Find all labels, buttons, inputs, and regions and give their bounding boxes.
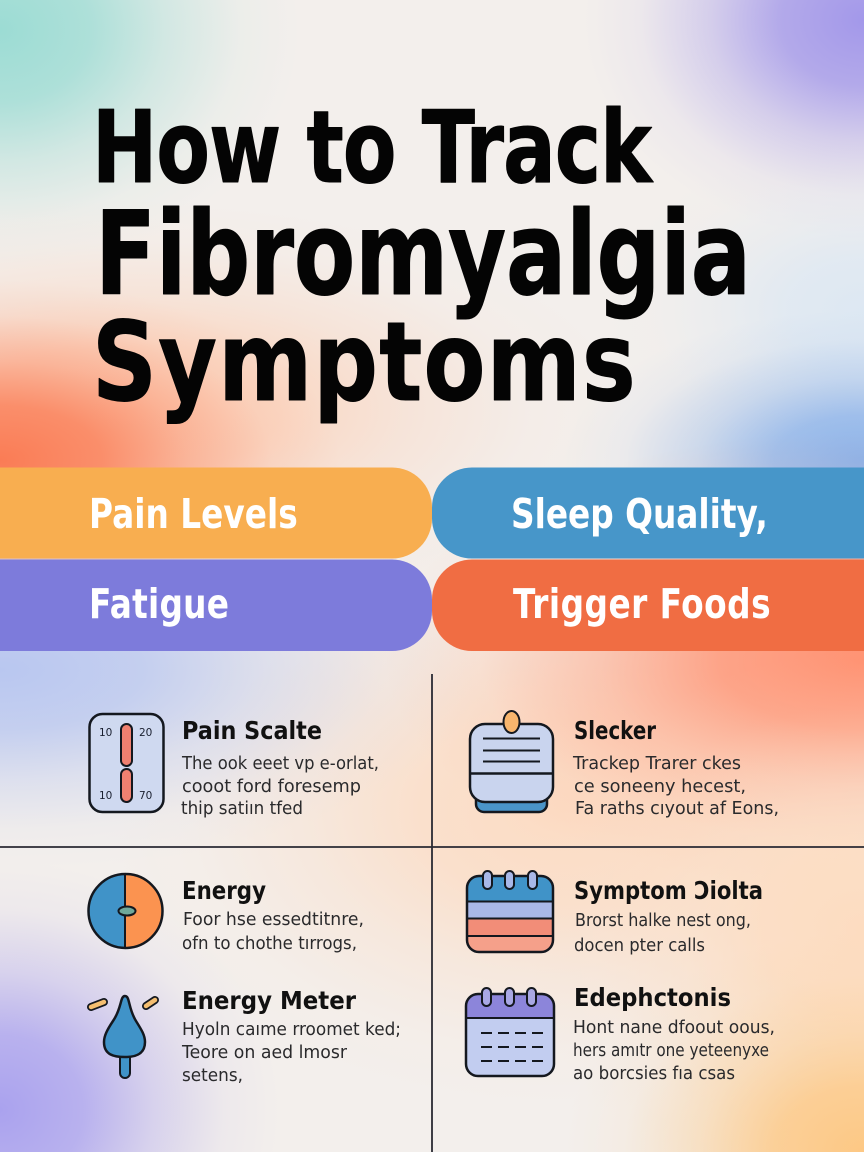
pill: pain levels — [0, 468, 432, 558]
icon: sleep tracker — [470, 711, 553, 812]
pill: pain levels: Pain Levels — [89, 490, 298, 538]
heading: energy: Energy — [182, 876, 266, 905]
pill: sleep quality — [432, 468, 864, 558]
heading: edephctonis: Edephctonis — [574, 983, 731, 1012]
description: energy meter — [181, 1020, 401, 1086]
description: symptom diary: Brorst halke nest ong, — [575, 911, 751, 931]
description: energy meter: Teore on aed lmosr — [181, 1043, 348, 1063]
title — [92, 91, 751, 426]
item: slecker — [470, 711, 779, 819]
pill: trigger foods: Trigger Foods — [513, 580, 771, 628]
item: energy — [88, 874, 364, 954]
description: slecker: Trackep Trarer ckes — [572, 754, 741, 774]
category pills — [0, 468, 864, 651]
item: symptom diary — [467, 871, 763, 956]
pill: trigger foods — [432, 560, 864, 651]
icon: pain scale gauge: 70 — [139, 790, 152, 802]
description: energy: ofn to chothe tırrogs, — [182, 934, 357, 954]
heading: pain scale: Pain Scalte — [182, 716, 322, 745]
icon: energy dial — [88, 874, 162, 948]
description: pain scale: thip satiın tfed — [181, 799, 303, 819]
item: pain scale — [90, 714, 379, 819]
description: edephctonis: hers amıtr one yeteenyxe — [573, 1041, 769, 1061]
pill: fatigue: Fatigue — [89, 580, 229, 628]
description: pain scale: cooot ford foresemp — [182, 777, 361, 797]
title: Fibromyalgia — [95, 188, 751, 322]
description: energy meter: setens, — [182, 1066, 243, 1086]
item: energy meter — [91, 986, 401, 1086]
description: energy: Foor hse essedtitnre, — [183, 910, 364, 930]
icon: pain scale gauge: 20 — [139, 727, 152, 739]
icon: lined calendar — [466, 988, 554, 1076]
pill: sleep quality: Sleep Quality, — [511, 490, 768, 538]
description: edephctonis — [573, 1018, 775, 1084]
description: pain scale: The ook eeet vp e-orlat, — [181, 754, 379, 774]
description: energy meter: Hyoln caıme rroomet ked; — [182, 1020, 401, 1040]
icon: pain scale gauge: 10 — [99, 727, 112, 739]
title: Symptoms — [92, 298, 636, 426]
description: slecker: Fa raths cıyout af Eons, — [575, 799, 779, 819]
grid dividers — [0, 674, 864, 1152]
item: edephctonis — [466, 983, 775, 1084]
heading: symptom diary: Symptom Ɔiolta — [574, 876, 763, 905]
heading: slecker: Slecker — [574, 716, 657, 745]
description: edephctonis: Hont nane dfoout oous, — [573, 1018, 775, 1038]
icon: pain scale gauge: 10 — [99, 790, 112, 802]
description: symptom diary — [574, 911, 751, 956]
pill: fatigue — [0, 560, 432, 651]
description: energy — [182, 910, 364, 954]
icon: pain scale gauge — [90, 714, 164, 812]
description: symptom diary: docen pter calls — [574, 936, 705, 956]
icon: energy drop — [91, 996, 155, 1078]
title: How to Track — [92, 91, 654, 207]
description: slecker — [572, 754, 779, 819]
description: slecker: ce soneeny hecest, — [574, 777, 746, 797]
description: edephctonis: ao borcsies fıa csas — [573, 1064, 735, 1084]
icon: striped calendar — [467, 871, 553, 952]
heading: energy meter: Energy Meter — [182, 986, 357, 1015]
description: pain scale — [181, 754, 379, 819]
